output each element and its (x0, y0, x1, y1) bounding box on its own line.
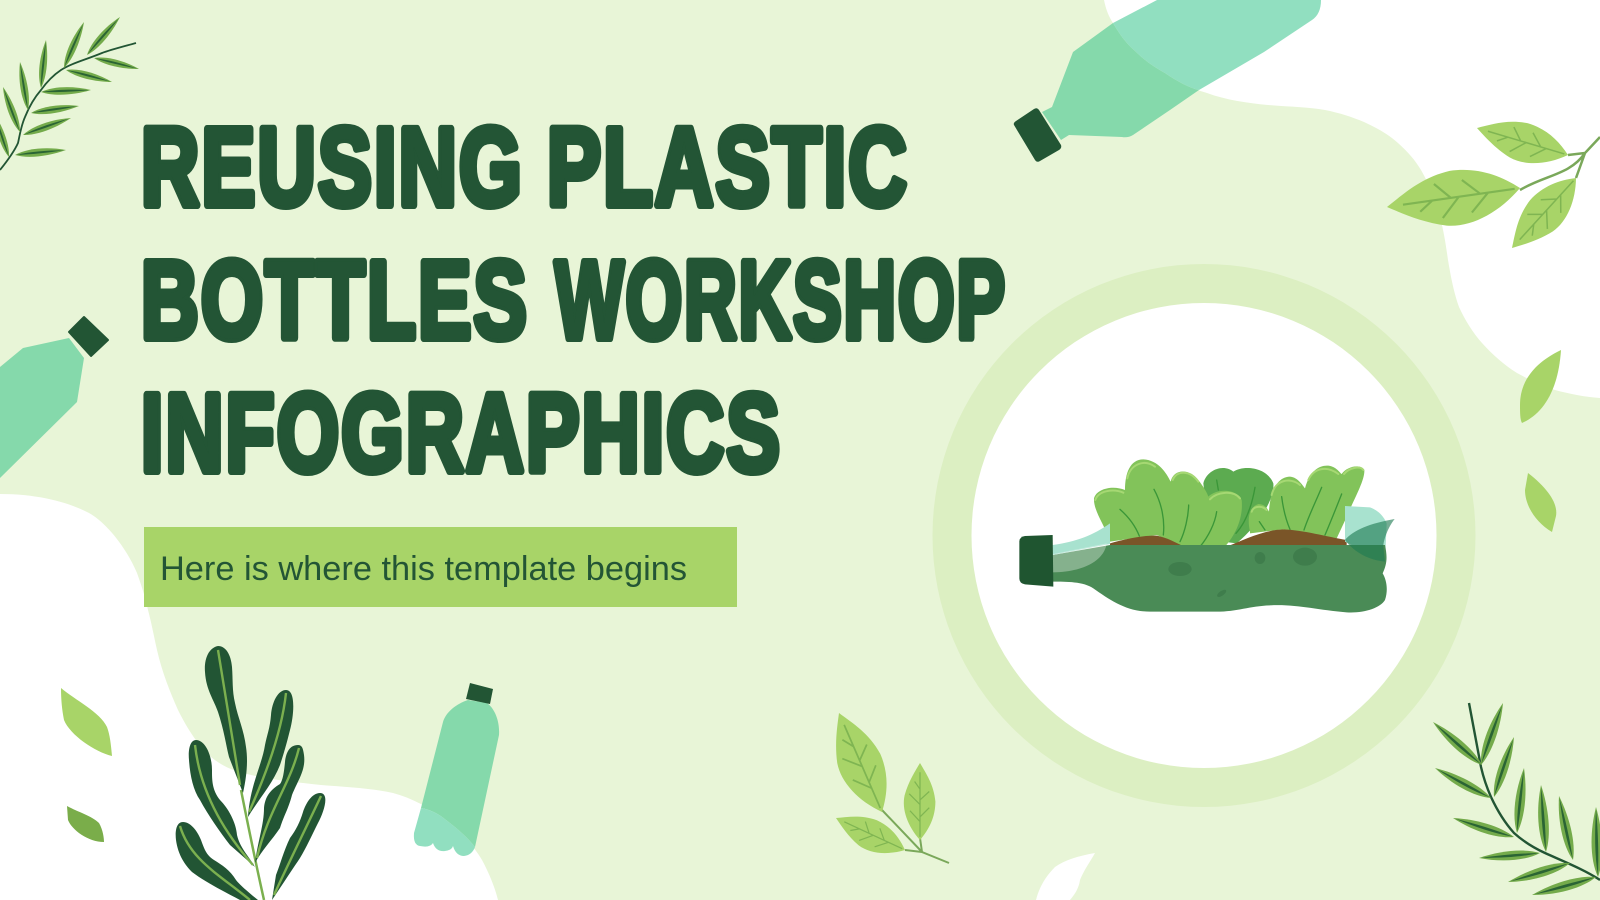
white blob: bottom centre (1036, 853, 1095, 900)
bottle body (1053, 545, 1387, 612)
icon: top bottle (1014, 0, 1321, 162)
white blob: bottom left (0, 494, 498, 900)
icon: right leaf small (1525, 473, 1556, 532)
circle ring (932, 264, 1476, 807)
title line 1: REUSING (141, 106, 524, 229)
neck highlight (1053, 543, 1107, 572)
title line 2 second word: WORKSHOP (555, 239, 1007, 362)
icon: top-left fern (0, 14, 140, 170)
circle inner (972, 303, 1436, 768)
neck transparent band (1053, 523, 1110, 555)
icon: bottle planter with lettuce (1019, 459, 1395, 612)
soil (1110, 529, 1347, 547)
title line 2: BOTTLES (141, 239, 529, 362)
icon: left light leaf (61, 688, 112, 756)
icon: top-right leaf twig (1383, 110, 1600, 261)
bottle cap (1019, 535, 1053, 587)
icon: bottom-right fern (1430, 701, 1600, 900)
right lettuce (1249, 466, 1364, 538)
icon: left bottle (0, 317, 108, 478)
right end shading (1345, 519, 1395, 562)
subtitle text: Here is where this template begins (160, 550, 687, 588)
icon: bottom-centre leaf twig (818, 704, 949, 865)
lettuce veins (1120, 480, 1342, 547)
lettuce highlights (1095, 463, 1363, 512)
title line 3: INFOGRAPHICS (141, 372, 782, 495)
title line 1 second word: PLASTIC (547, 106, 909, 229)
icon: right leaf large (1520, 350, 1561, 423)
back lettuce (1203, 468, 1273, 543)
body spots (1168, 548, 1317, 598)
right transparent end (1345, 506, 1387, 562)
icon: left darker leaf (67, 806, 104, 842)
white blob: top right (1104, 0, 1600, 398)
icon: seaweed plant (176, 646, 325, 900)
left lettuce (1094, 459, 1242, 548)
icon: bottom bottle (414, 683, 499, 856)
title (141, 106, 1007, 495)
subtitle box (144, 527, 737, 607)
